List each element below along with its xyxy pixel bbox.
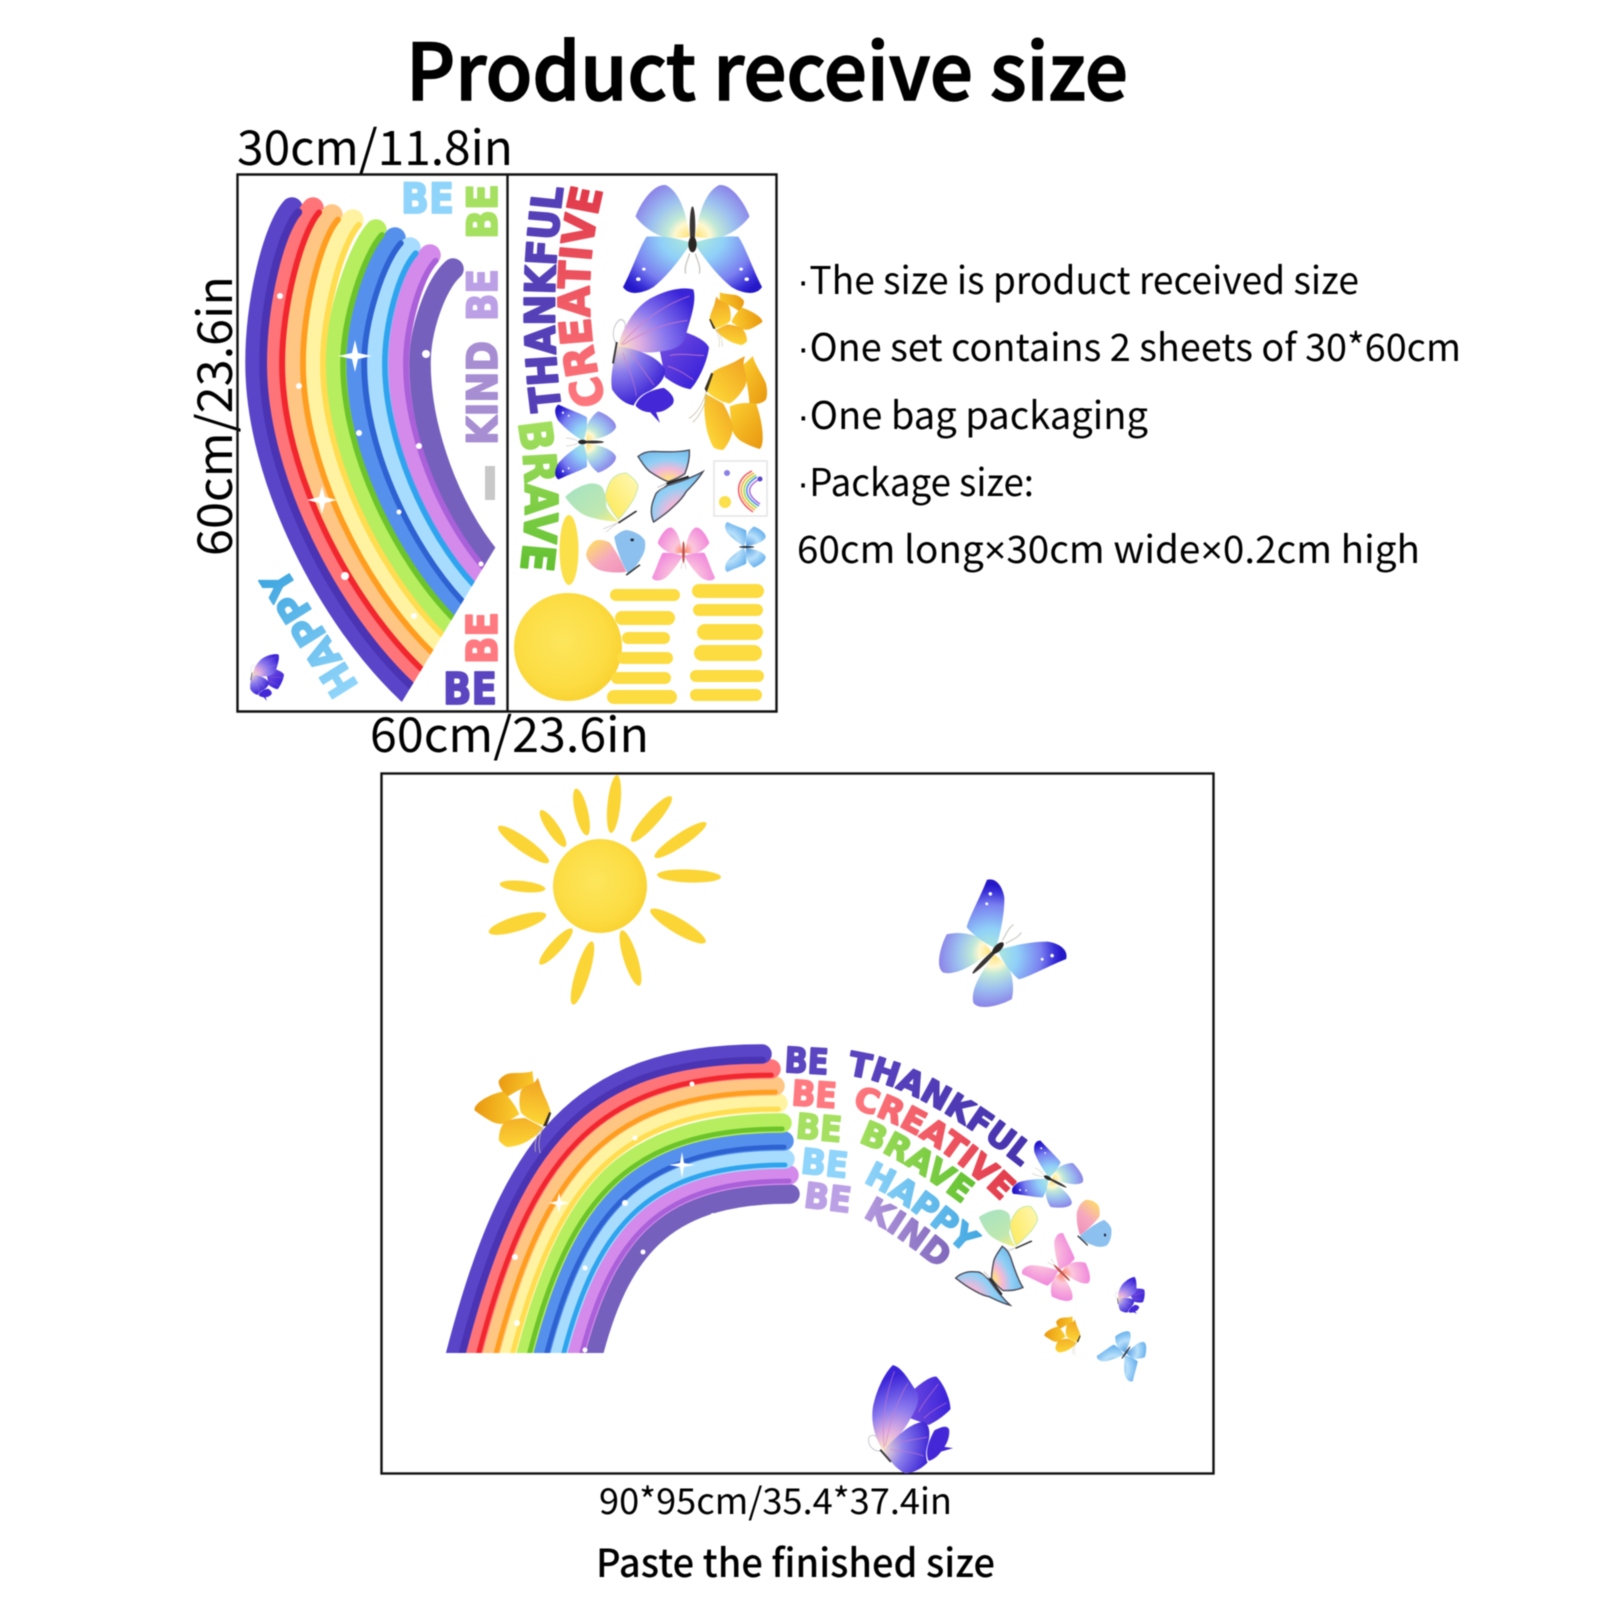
icon: large purple butterfly [611, 288, 709, 423]
finished size dimensions: 90*95cm/35.4*37.4in [599, 1473, 952, 1525]
left sheet rainbow [256, 208, 507, 703]
sun ray vertical [560, 515, 578, 585]
word: BE purple: BE [443, 664, 497, 715]
word: KIND: KIND [458, 341, 507, 445]
icon: blue butterfly on side [555, 404, 616, 480]
icon: purple butterfly tiny [1111, 1275, 1151, 1319]
sun [487, 774, 721, 1007]
icon: pink butterfly small [1020, 1231, 1101, 1312]
word: BE lavender: BE [802, 1176, 853, 1222]
panel: finished size [379, 771, 1216, 1476]
sheet outline [238, 174, 776, 712]
icon: green butterfly small [972, 1196, 1040, 1259]
icon: small purple butterfly [250, 654, 284, 701]
word: BE blue: BE [401, 174, 454, 223]
curved word: CREATIVE: CREATIVE [855, 1086, 1018, 1202]
note 5: 60cm long×30cm wide×0.2cm high [797, 519, 1420, 574]
icon: pink yellow butterfly [586, 530, 645, 575]
word: CREATIVE: CREATIVE [556, 185, 604, 407]
icon: large orange butterfly [689, 356, 767, 450]
icon: green butterfly [565, 473, 638, 532]
icon: blue butterfly top right [919, 876, 1070, 1027]
width label: 30cm/11.8in: 30cm/11.8in [237, 109, 513, 179]
sheets width label: 60cm/23.6in: 60cm/23.6in [370, 696, 649, 766]
curved word: THANKFUL: THANKFUL [849, 1049, 1028, 1168]
word: BE green: BE [458, 184, 507, 239]
curved word: HAPPY: HAPPY [864, 1160, 983, 1250]
panel outline [382, 774, 1214, 1474]
word: BE lavender: BE [458, 269, 507, 321]
title: Product receive size [406, 11, 1128, 123]
word: BE purple: BE [784, 1041, 830, 1083]
word: BE blue: BE [799, 1142, 850, 1187]
tiny label strip [485, 466, 495, 500]
icon: orange butterfly left [469, 1060, 576, 1168]
curved word: KIND: KIND [864, 1196, 950, 1265]
icon: pink yellow butterfly small [1071, 1196, 1115, 1251]
icon: small orange butterfly [692, 285, 766, 359]
caption: Paste the finished size: Paste the finished size [596, 1533, 995, 1589]
sun disc [514, 593, 622, 701]
sun ray pieces [607, 584, 764, 704]
height label: 60cm/23.6in: 60cm/23.6in [176, 276, 246, 556]
word: BRAVE: BRAVE [517, 420, 560, 572]
icon: purple butterfly bottom [845, 1352, 981, 1488]
panel: received sheets [235, 172, 778, 715]
note 4: ·Package size: [797, 452, 1034, 507]
icon: pink butterfly [652, 527, 715, 581]
note 3: ·One bag packaging [797, 385, 1148, 440]
word: BE red: BE [790, 1074, 838, 1117]
icon: blue butterfly small [1010, 1139, 1091, 1220]
text block: product notes [797, 250, 1461, 574]
sticker thumbnail [714, 461, 767, 516]
note 2: ·One set contains 2 sheets of 30*60cm [797, 317, 1461, 372]
icon: orange butterfly tiny [1042, 1311, 1092, 1362]
word: HAPPY: HAPPY [253, 559, 367, 705]
word: THANKFUL: THANKFUL [522, 186, 565, 415]
icon: multicolour butterfly small [951, 1244, 1027, 1320]
word: BE red: BE [458, 612, 508, 664]
rainbow [450, 1054, 790, 1376]
word: BE green: BE [794, 1107, 844, 1151]
icon: sky butterfly [725, 522, 766, 572]
note 1: ·The size is product received size [797, 250, 1359, 305]
curved word: BRAVE: BRAVE [859, 1119, 976, 1204]
icon: sky butterfly tiny [1096, 1324, 1155, 1383]
icon: multicolour butterfly [638, 450, 703, 522]
icon: large blue butterfly [623, 185, 762, 293]
